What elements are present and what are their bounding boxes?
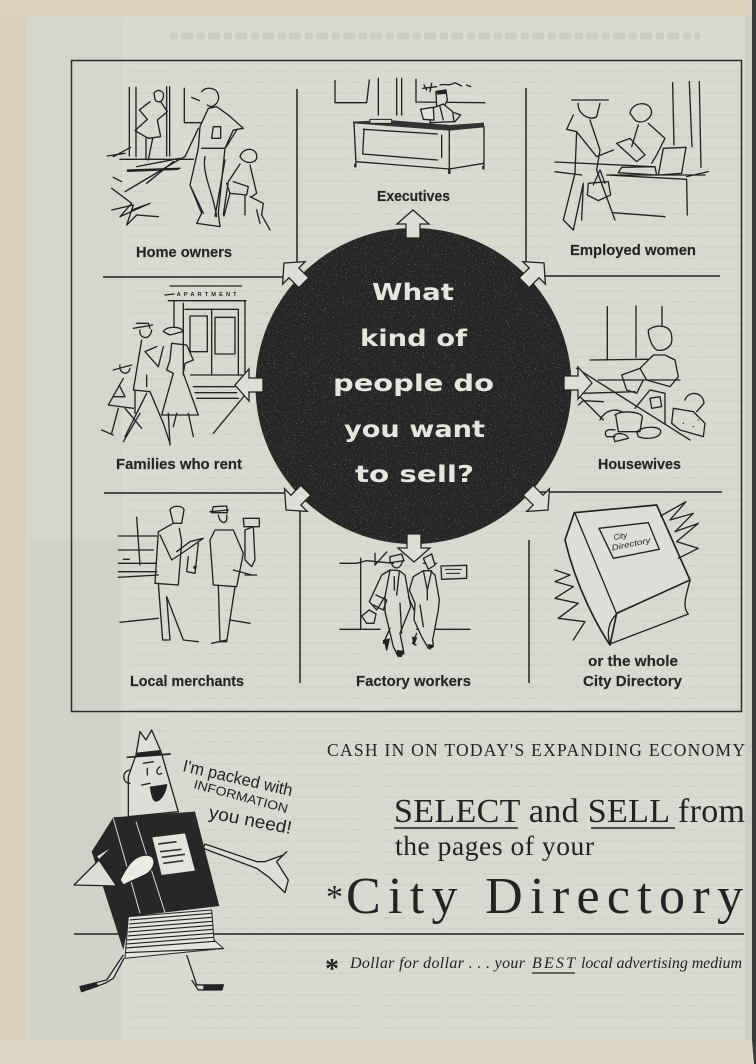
tagline: BEST	[532, 955, 576, 972]
circle question text: people do	[333, 371, 494, 397]
tagline: Dollar for dollar . . . your	[349, 955, 526, 972]
label: home owners: Home owners	[136, 245, 232, 261]
serif headline block: SELECT and SELL from	[394, 793, 745, 830]
arrows radiating from circle	[235, 210, 592, 562]
illustration: families who rent	[102, 286, 246, 445]
illustration: local merchants	[118, 506, 259, 643]
label: or the whole city directory	[583, 654, 682, 690]
central dark circle	[256, 228, 572, 544]
label: or the whole city directory: or the whole	[588, 654, 678, 670]
mascot speech text: I'm packed with	[181, 756, 295, 800]
circle question text: What	[372, 280, 454, 306]
illustration: home owners	[107, 87, 270, 230]
circle question text: kind of	[360, 326, 468, 352]
illustration: factory workers	[340, 552, 470, 657]
label: executives: Executives	[377, 189, 450, 205]
circle question text	[333, 280, 494, 488]
label: factory workers: Factory workers	[356, 674, 471, 690]
mascot speech text: you need!	[207, 802, 294, 838]
serif headline block: City Directory	[346, 868, 743, 925]
tagline: local advertising medium	[581, 955, 742, 972]
label: employed women: Employed women	[570, 243, 696, 259]
label: housewives: Housewives	[598, 457, 681, 473]
tagline	[325, 954, 742, 985]
illustration: city directory book: City	[613, 531, 629, 542]
serif headline block: the pages of your	[395, 830, 594, 861]
label: families who rent: Families who rent	[116, 457, 242, 473]
mascot speech text: INFORMATION	[192, 777, 290, 816]
divider rule	[74, 933, 744, 935]
illustration: city directory book	[555, 502, 698, 645]
illustration: employed women	[555, 82, 708, 230]
serif headline block: *	[326, 879, 343, 916]
illustration: housewives	[577, 306, 705, 442]
circle question text: to sell?	[355, 462, 474, 488]
serif headline block	[326, 740, 745, 925]
serif headline block: CASH IN ON TODAY'S EXPANDING ECONOMY	[327, 740, 745, 760]
mascot speech text	[181, 756, 295, 838]
main framed panel	[72, 60, 742, 712]
illustration: city directory book: Directory	[611, 535, 652, 553]
mascot: walking directory book man	[74, 730, 288, 992]
circle question text: you want	[344, 417, 485, 443]
label: or the whole city directory: City Directory	[583, 674, 682, 690]
illustration: executives	[335, 78, 485, 174]
tagline: *	[325, 954, 339, 985]
illustration: families who rent: APARTMENT	[177, 292, 237, 298]
label: local merchants: Local merchants	[130, 674, 244, 690]
